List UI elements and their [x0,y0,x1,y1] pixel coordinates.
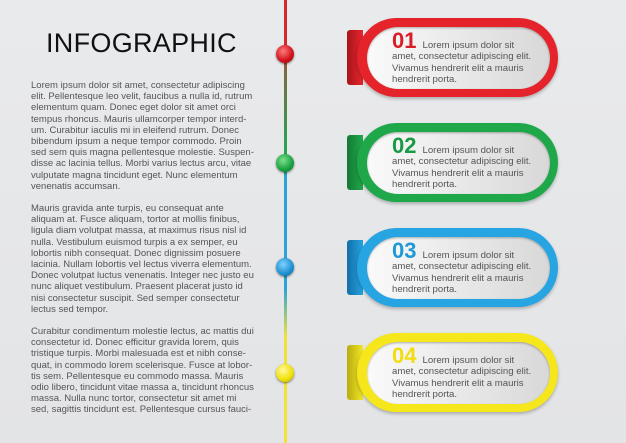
card text 04: Vivamus hendrerit elit a mauris [392,378,524,389]
card text 01: Vivamus hendrerit elit a mauris [392,63,524,74]
text block 3 [31,326,254,415]
ball: blue [276,258,294,276]
text block 1: tempus rhoncus. Mauris ullamcorper tempor interd- [31,114,246,125]
text block 2: ligula diam volutpat massa, at maximus risus nisl id [31,225,246,236]
card text 02: Vivamus hendrerit elit a mauris [392,168,524,179]
text block 3: tis sem. Pellentesque eu commodo massa. Mauris [31,371,243,382]
card text 04: hendrerit porta. [392,389,457,400]
timeline line [284,0,287,443]
card 02 [347,123,560,206]
card text 01 [392,28,531,85]
card text 02 [392,133,531,190]
text block 3: sed, sagittis tincidunt est. Pellentesque cursus fauci- [31,404,251,415]
text block 2: lobortis nibh consequat. Donec dignissim posuere [31,248,241,259]
card text 02: amet, consectetur adipiscing elit. [392,156,531,167]
text block 1 [31,80,254,192]
text block 2: nunc aliquet vestibulum. Praesent placerat justo id [31,281,243,292]
text block 3: quat, in commodo lorem scelerisque. Fusce at lobor- [31,360,252,371]
card text 02: hendrerit porta. [392,179,457,190]
card text 03: amet, consectetur adipiscing elit. [392,261,531,272]
card text 03: 03 Lorem ipsum dolor sit [392,238,514,263]
card 01 [347,18,560,101]
card text 04: amet, consectetur adipiscing elit. [392,366,531,377]
text block 2: aliquam at. Fusce aliquam, tortor at mollis finibus, [31,214,240,225]
card 04 [347,333,560,416]
text block 2 [31,203,254,315]
text block 1: um. Curabitur iaculis mi in eleifend rutrum. Donec [31,125,239,136]
text block 2: nisi consectetur suscipit. Sed semper consectetur [31,293,240,304]
card text 04: 04 Lorem ipsum dolor sit [392,343,514,368]
text block 3: tristique turpis. Morbi malesuada est et nibh conse- [31,348,246,359]
text block 1: elit. Pellentesque leo velit, faucibus a nulla id, rutrum [31,91,252,102]
text block 1: disse ac lacinia tellus. Morbi varius lectus arcu, vitae [31,158,251,169]
text block 2: Mauris gravida ante turpis, eu consequat ante [31,203,224,214]
text block 3: consectetur id. Donec efficitur gravida lorem, quis [31,337,239,348]
card text 03: hendrerit porta. [392,284,457,295]
card text 01: 01 Lorem ipsum dolor sit [392,28,514,53]
card text 02: 02 Lorem ipsum dolor sit [392,133,514,158]
card text 01: hendrerit porta. [392,74,457,85]
title: INFOGRAPHIC [46,28,237,58]
text block 2: lectus sed tempor. [31,304,108,315]
text block 1: bibendum ipsum a neque tempor commodo. Proin [31,136,242,147]
text block 1: venenatis accumsan. [31,181,120,192]
text block 2: nulla. Vestibulum euismod turpis a ex semper, eu [31,237,237,248]
text block 3: Curabitur condimentum molestie lectus, ac mattis dui [31,326,254,337]
text block 1: vulputate magna tincidunt eget. Nunc elementum [31,170,238,181]
card 03 [347,228,560,311]
text block 2: lacinia. Nullam lobortis vel lectus viverra elementum. [31,259,252,270]
card text 01: amet, consectetur adipiscing elit. [392,51,531,62]
ball: yellow [276,364,294,382]
text block 1: sed sem quis magna pellentesque molestie. Suspen- [31,147,254,158]
card text 03: Vivamus hendrerit elit a mauris [392,273,524,284]
ball: red [276,45,294,63]
text block 3: massa. Nulla nunc tortor, consectetur sit amet mi [31,393,236,404]
text block 2: Donec volutpat luctus venenatis. Integer nec justo eu [31,270,254,281]
text block 1: elementum quam. Donec eget dolor sit amet orci [31,102,236,113]
text block 3: odio libero, tincidunt vitae massa a, tincidunt rhoncus [31,382,254,393]
ball: green [276,154,294,172]
text block 1: Lorem ipsum dolor sit amet, consectetur adipiscing [31,80,245,91]
card text 03 [392,238,531,295]
card text 04 [392,343,531,400]
